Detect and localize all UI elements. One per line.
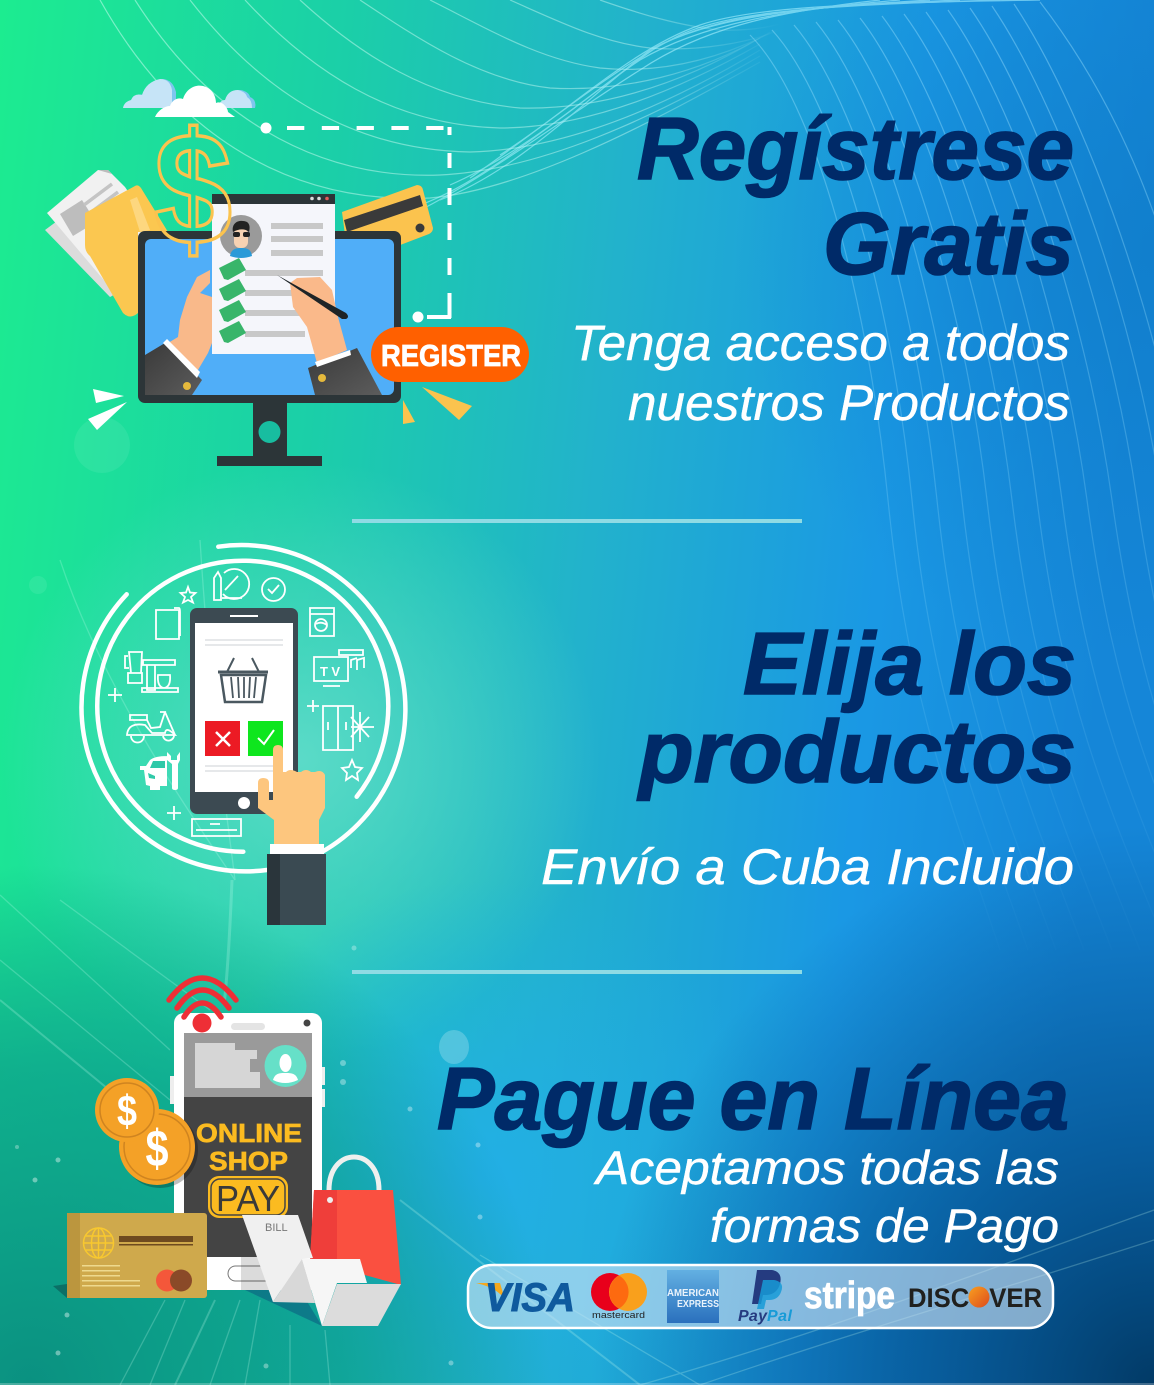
- logo: Stripe: stripe: [804, 1275, 895, 1317]
- icon: star right: [342, 760, 362, 780]
- icon: tablet: [156, 608, 180, 639]
- icon: fridge and snow: [323, 706, 374, 750]
- heading: Regístrese Gratis: Regístrese: [637, 99, 1074, 198]
- phone: SHOP: [209, 1146, 288, 1176]
- button: pay: PAY: [216, 1178, 280, 1219]
- logo: American Express: AMERICAN: [667, 1287, 719, 1299]
- icon: yellow sparks: [403, 387, 472, 424]
- divider: [352, 970, 802, 974]
- heading: Regístrese Gratis: [637, 99, 1074, 293]
- button: accept: [248, 721, 283, 756]
- icon: star: [180, 587, 196, 602]
- icon: TV and music: [314, 650, 364, 686]
- icon: plus left: [108, 688, 122, 702]
- logo: Mastercard: [591, 1273, 647, 1321]
- icon: papers: [45, 170, 168, 297]
- text: payment subtitle: Aceptamos todas las: [593, 1141, 1059, 1194]
- icon: shopping basket: [218, 658, 268, 702]
- phone: [170, 1013, 325, 1290]
- avatar: [220, 215, 262, 258]
- icon: clouds: [123, 79, 255, 117]
- icon: user avatar: [264, 1045, 306, 1087]
- logo: Discover: DISCOVER: [908, 1283, 1042, 1313]
- divider: [352, 519, 802, 523]
- illustration: register on computer: [45, 79, 529, 466]
- monitor: [138, 231, 401, 466]
- icon: dollar sign outline: $: [154, 99, 232, 278]
- logo: PayPal: Pal: [767, 1308, 793, 1325]
- icon: shopping bag: [310, 1157, 401, 1285]
- icon: gold coins: [95, 1078, 198, 1188]
- icon: washer: [310, 608, 334, 636]
- icon: gold coins: $: [117, 1087, 137, 1136]
- icon: blender and mixer: [125, 652, 178, 692]
- button: register: [371, 327, 529, 382]
- icon: receipt bill: BILL: [265, 1222, 288, 1234]
- button: reject: [205, 721, 240, 756]
- text: register subtitle: [571, 315, 1070, 431]
- icon: lipstick and mirror: [214, 569, 249, 600]
- illustration: choose products on phone: [81, 545, 405, 925]
- hand left: [145, 270, 212, 395]
- logo: American Express: EXPRESS: [677, 1298, 719, 1310]
- checkmarks: [219, 258, 246, 343]
- icon: bank card: [342, 185, 433, 247]
- text: payment subtitle: [593, 1141, 1059, 1252]
- icon: gold coins: $: [146, 1120, 169, 1178]
- icon: folder: [85, 185, 168, 316]
- heading: Elija los productos: [637, 614, 1076, 801]
- icon: white sparks: [88, 389, 127, 430]
- panel: payment logos: [468, 1265, 1053, 1328]
- logo: PayPal: Pay: [738, 1308, 768, 1325]
- phone: [190, 608, 298, 814]
- illustration: online payment: [53, 978, 401, 1326]
- text: register subtitle: nuestros Productos: [628, 375, 1070, 431]
- heading: Elija los productos: Elija los: [743, 614, 1076, 713]
- icon: credit card: [53, 1213, 207, 1298]
- icon: plus right: [307, 700, 319, 712]
- logo: Mastercard: mastercard: [592, 1310, 645, 1321]
- logo: PayPal: [738, 1270, 793, 1325]
- icon: wifi signal: [169, 978, 236, 1032]
- hand right: [277, 275, 382, 395]
- icon: air conditioner: [192, 819, 241, 836]
- icon: dashed connector: [260, 122, 451, 322]
- heading: Elija los productos: productos: [637, 702, 1076, 801]
- rings: [81, 545, 405, 871]
- icon: plus bottom: [167, 806, 181, 820]
- phone: ONLINE: [196, 1118, 302, 1148]
- icon: clock: [262, 578, 285, 601]
- icon: pointing hand: [258, 745, 326, 925]
- icon: scooter: [127, 712, 175, 742]
- heading: Pague en Línea: Pague en Línea: [437, 1049, 1069, 1148]
- icon: receipt bill: [242, 1215, 401, 1326]
- logo: Visa: VISA: [485, 1276, 575, 1320]
- heading: Regístrese Gratis: Gratis: [823, 194, 1074, 293]
- logo: American Express: [667, 1270, 719, 1323]
- icon: car and wrench: [140, 752, 180, 790]
- illustration: choose products on phone: TV: [320, 664, 340, 679]
- product line icons: [108, 569, 374, 836]
- text: shipping subtitle: Envío a Cuba Incluido: [541, 839, 1074, 895]
- document form: [212, 194, 335, 354]
- button: register: REGISTER: [381, 338, 521, 373]
- text: register subtitle: Tenga acceso a todos: [571, 315, 1070, 371]
- text: payment subtitle: formas de Pago: [710, 1199, 1059, 1252]
